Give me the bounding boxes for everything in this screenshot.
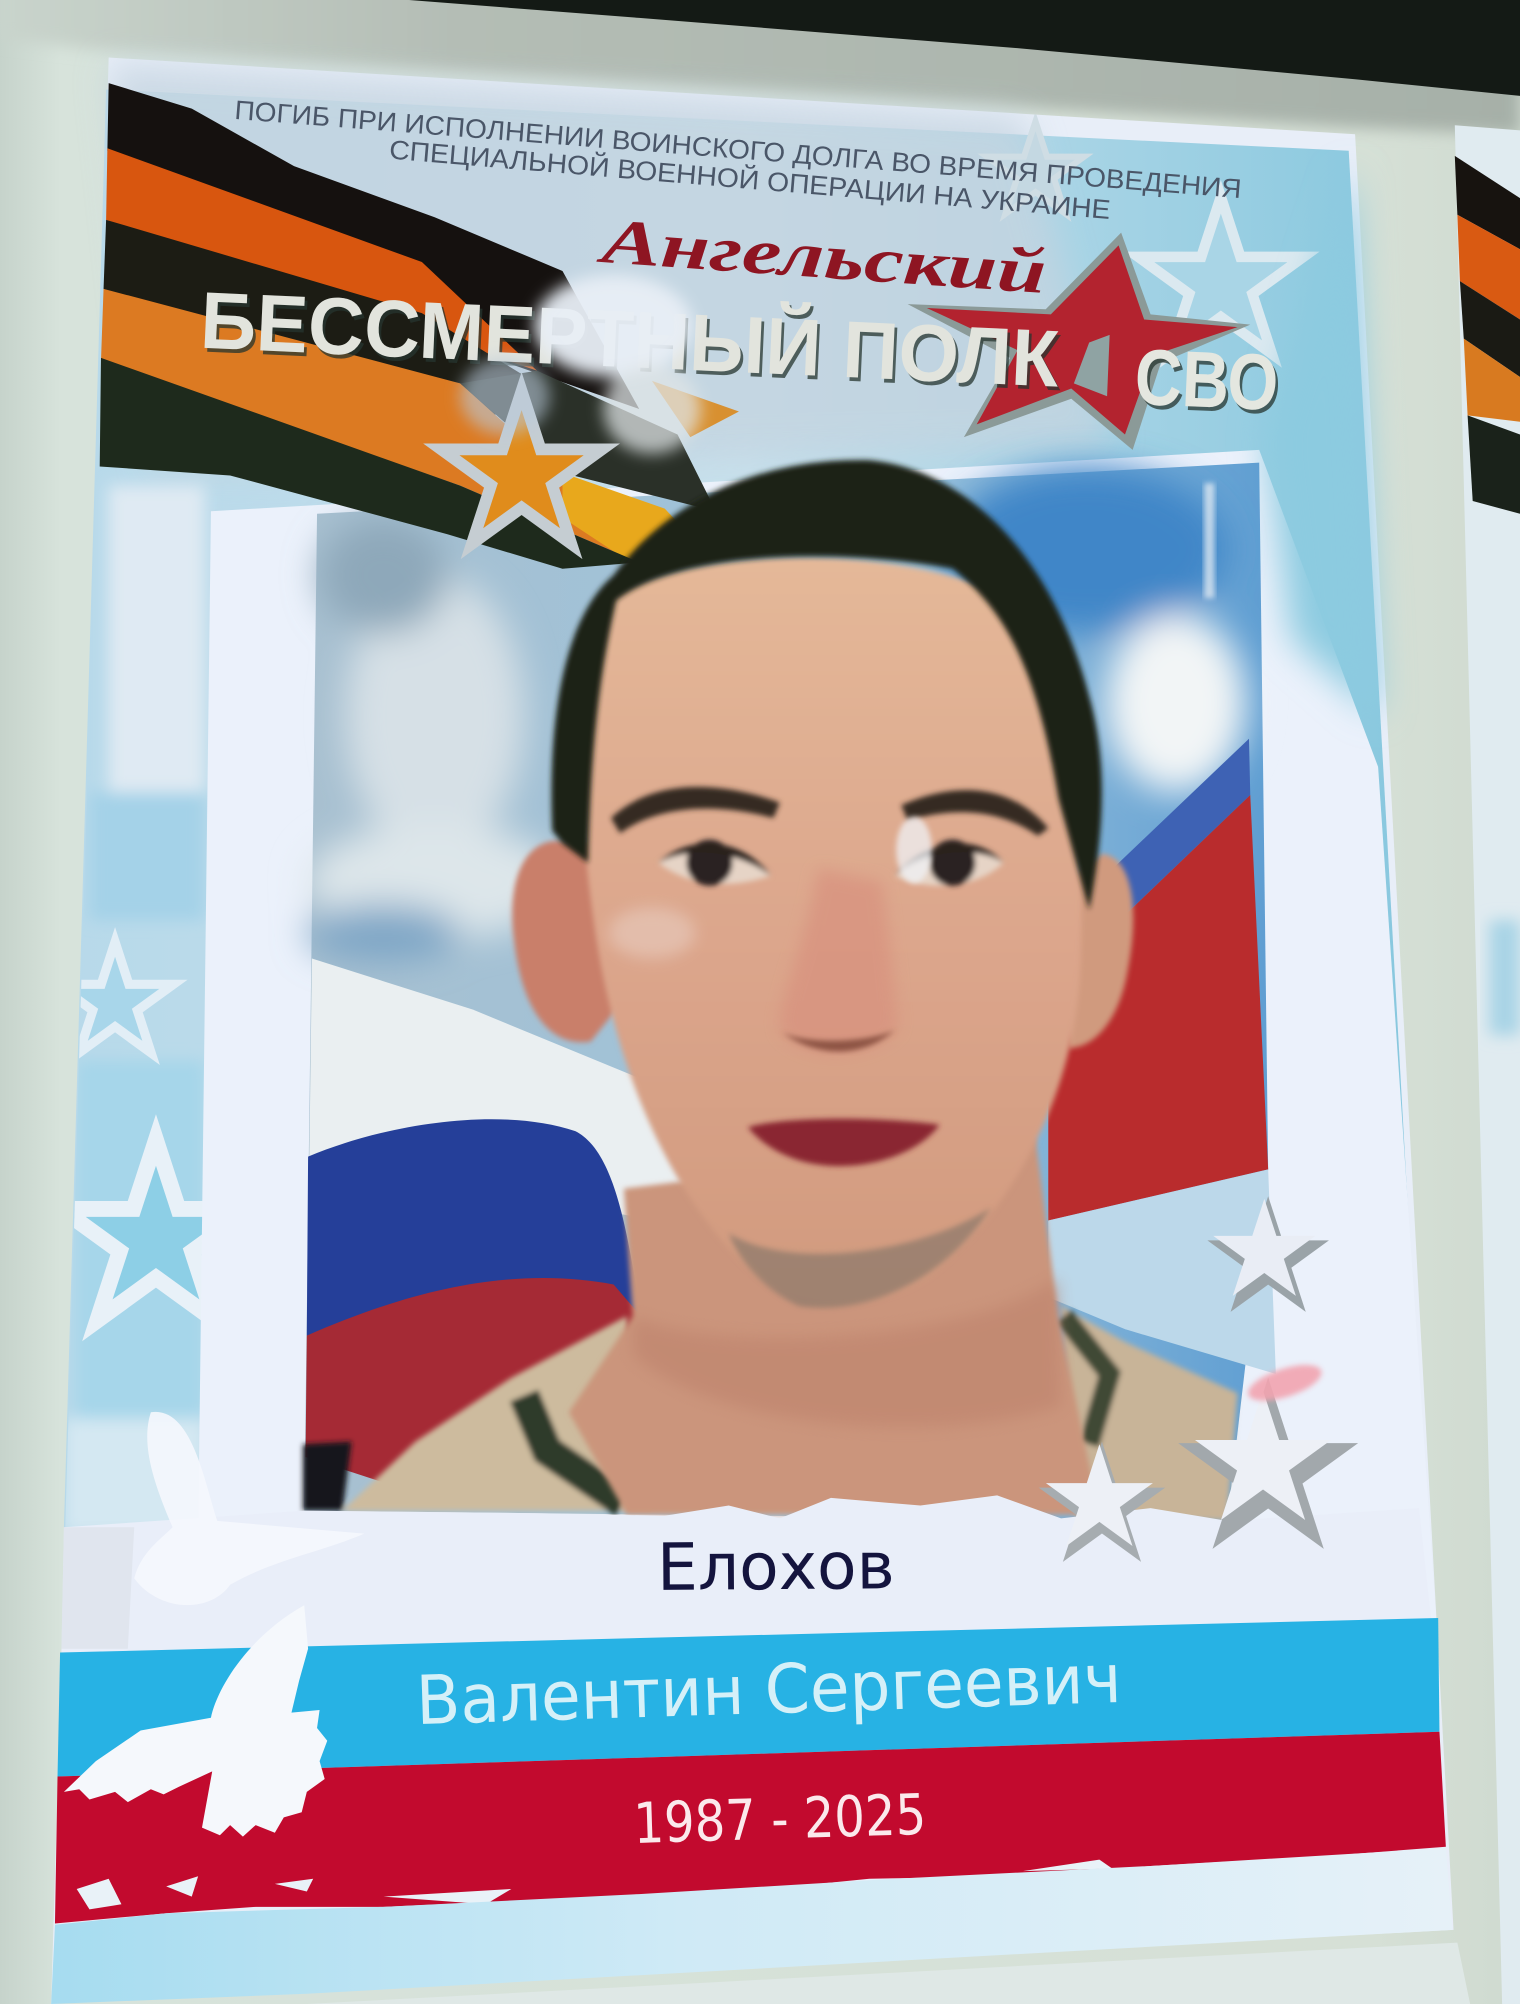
glare over title <box>460 275 701 454</box>
torn white lower edge of photo <box>61 1495 1434 1655</box>
shirt <box>303 1306 1237 1521</box>
background star: left upper <box>57 942 173 1053</box>
surname: Елохов <box>657 1528 895 1606</box>
header line 2: СПЕЦИАЛЬНОЙ ВОЕННОЙ ОПЕРАЦИИ НА УКРАИНЕ <box>388 134 1112 225</box>
background stars clipped to poster <box>57 121 1304 1534</box>
main title: БЕССМЕРТНЫЙ ПОЛК: БЕССМЕРТНЫЙ ПОЛК <box>199 275 1062 405</box>
photo clouds <box>307 466 1246 961</box>
background star: top right <box>1138 197 1304 354</box>
blue fade at right top <box>1266 166 1378 716</box>
face glare <box>896 817 932 883</box>
photo sky <box>304 463 1268 1521</box>
neighbouring poster at right <box>1455 125 1520 2004</box>
photo backdrop <box>304 463 1276 1521</box>
script title: Ангельский <box>594 205 1049 307</box>
flag right blue stripe <box>1112 739 1250 915</box>
background star: left lower <box>74 1114 202 1341</box>
given name: Валентин Сергеевич <box>415 1639 1123 1740</box>
main title: БЕССМЕРТНЫЙ ПОЛК: БЕССМЕРТНЫЙ ПОЛК <box>201 279 1064 408</box>
blue sky background <box>64 89 1425 1527</box>
left ear <box>512 841 626 1042</box>
flag red panel left <box>306 1278 652 1483</box>
flag right red panel <box>1048 795 1268 1221</box>
pale top area <box>109 64 1112 473</box>
ribbon gold star <box>441 391 602 544</box>
lower blue strip <box>51 1848 1452 2004</box>
left lower fade <box>61 1527 134 1649</box>
right eye <box>895 840 1004 886</box>
nostril shadow <box>782 1030 895 1052</box>
faded dove <box>134 1412 364 1605</box>
hair <box>552 460 1102 910</box>
lips <box>748 1119 940 1166</box>
face <box>581 558 1081 1304</box>
torn red edge specks <box>77 1860 1112 1909</box>
right eyebrow <box>901 790 1048 836</box>
St George ribbon <box>100 83 739 569</box>
left sky texture <box>64 486 205 1534</box>
background star: top faint <box>987 121 1084 214</box>
dark ceiling strip <box>409 0 1520 96</box>
lower poster edge <box>307 1943 1470 2004</box>
left eyebrow <box>611 787 780 833</box>
upper wall shadow <box>0 0 1520 134</box>
stubble <box>729 1208 991 1308</box>
blue name band <box>58 1618 1439 1777</box>
silver star: large right <box>1178 1378 1358 1549</box>
silver star: lower centre <box>1039 1442 1165 1562</box>
photo sky glare <box>1204 483 1214 598</box>
red star emblem <box>908 233 1250 450</box>
main title: СВО: СВО <box>1133 332 1280 427</box>
silver star: upper right <box>1207 1196 1329 1312</box>
left eye <box>658 840 771 886</box>
white dove <box>64 1605 327 1837</box>
right ear <box>1048 854 1133 1048</box>
lower right cloud <box>1048 1169 1276 1374</box>
cheek glare <box>609 907 695 959</box>
main title: СВО: СВО <box>1136 336 1283 431</box>
portrait <box>303 460 1237 1521</box>
nose <box>780 869 897 1053</box>
flag white panel <box>309 959 690 1227</box>
neck shadow <box>633 1278 1061 1427</box>
neck <box>569 1137 1099 1515</box>
header line 1: ПОГИБ ПРИ ИСПОЛНЕНИИ ВОИНСКОГО ДОЛГА ВО ВРЕМЯ ПРОВЕДЕНИЯ <box>233 95 1243 204</box>
life dates: 1987 - 2025 <box>632 1783 927 1857</box>
pink reflection glare <box>1244 1358 1326 1408</box>
flag blue panel left <box>307 1119 639 1336</box>
red dates band <box>55 1732 1446 1923</box>
white photo frame <box>198 450 1438 1649</box>
